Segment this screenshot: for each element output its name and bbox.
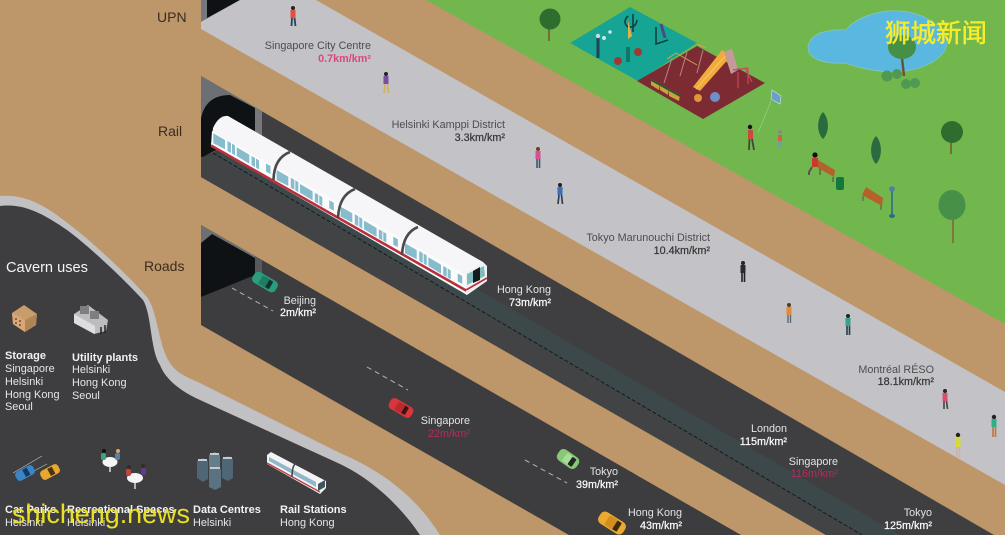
tree and bushes at pond: [882, 35, 920, 89]
walkway density labels: [265, 40, 934, 388]
lamp post: [889, 186, 895, 218]
road density labels: 22m/km²: [428, 428, 470, 440]
cavern bottom text labels: Helsinki: [67, 517, 105, 529]
train front: [466, 263, 487, 295]
car: Hong Kong yellow: [596, 510, 628, 535]
cavern bottom text labels: [5, 504, 347, 529]
train windows: [213, 133, 462, 284]
train: [211, 116, 487, 295]
road density labels: 39m/km²: [576, 479, 618, 491]
kite and flyers: [748, 90, 782, 150]
icon: storage box: [12, 305, 37, 332]
car: Beijing teal: [250, 270, 280, 294]
road tunnel level: [201, 225, 741, 535]
fitness area: [570, 7, 697, 81]
tier labels: UPN: [157, 9, 187, 25]
road density labels: Tokyo: [590, 466, 618, 478]
walkway density labels: Montréal RÉSO: [858, 363, 934, 376]
rail density labels: 115m/km²: [740, 436, 787, 448]
tier labels: [144, 9, 187, 274]
rail density labels: Singapore: [789, 456, 838, 468]
pedestrians: [290, 6, 996, 458]
cavern bottom text labels: Rail Stations: [280, 504, 347, 516]
storage text: Singapore: [5, 363, 55, 375]
bench with seated person: [809, 152, 835, 182]
bench: [862, 187, 883, 210]
rail density labels: London: [751, 423, 787, 435]
storage text: Seoul: [5, 401, 33, 413]
cavern bottom text labels: Data Centres: [193, 504, 261, 516]
UPN walkway level: [201, 0, 1005, 485]
walkway density labels: 18.1km/km²: [878, 376, 934, 388]
walkway density labels: Tokyo Marunouchi District: [586, 232, 710, 244]
cavern area with grey lining: [0, 196, 440, 535]
rail tunnel level: [201, 76, 994, 535]
litter bin: [836, 177, 844, 190]
playground area: [637, 44, 765, 119]
surface park lawn: [426, 0, 1005, 324]
cypress trees: [818, 112, 881, 164]
tree near playground: [540, 8, 560, 41]
icon: data centres: [197, 452, 233, 490]
cavern uses heading: Cavern uses: [6, 260, 88, 276]
icon: car parks: [13, 456, 61, 482]
rail density labels: Hong Kong: [497, 284, 551, 296]
storage text: Storage: [5, 350, 46, 362]
road density labels: Beijing: [284, 295, 316, 307]
icon: rail station train: [267, 452, 326, 494]
cavern bottom text labels: Car Parks: [5, 504, 56, 516]
car: Tokyo light green: [555, 447, 581, 471]
rail density labels: [497, 284, 932, 532]
road density labels: [280, 295, 682, 532]
tree right: [941, 121, 963, 154]
icon: utility plant: [74, 305, 108, 334]
storage text: Hong Kong: [5, 389, 60, 401]
icon: recreational tables: [101, 449, 146, 489]
road density labels: 43m/km²: [640, 520, 682, 532]
utility plants text: [72, 352, 138, 402]
rail density labels: 116m/km²: [791, 468, 838, 480]
road density labels: Hong Kong: [628, 507, 682, 519]
walkway density labels: Helsinki Kamppi District: [392, 119, 505, 131]
watermark: Chinese site name: 狮城新闻: [885, 13, 987, 50]
cavern bottom text labels: Helsinki: [193, 517, 231, 529]
road density labels: 2m/km²: [280, 307, 316, 319]
rail density labels: Tokyo: [904, 507, 932, 519]
walkway density labels: 3.3km/km²: [455, 132, 505, 144]
tree lower right: [938, 190, 966, 243]
walkway density labels: 0.7km/km²: [318, 53, 371, 65]
walkway density labels: Singapore City Centre: [265, 40, 371, 52]
cavern bottom text labels: Recreational Spaces: [67, 504, 175, 516]
tier labels: Rail: [158, 123, 182, 139]
train red stripe: [211, 146, 467, 291]
pond: [808, 11, 947, 72]
utility plants text: Hong Kong: [72, 377, 126, 389]
road lane markings: [232, 288, 567, 483]
storage text: [5, 350, 60, 413]
cavern bottom text labels: Hong Kong: [280, 517, 334, 529]
utility plants text: Utility plants: [72, 352, 138, 364]
storage text: Helsinki: [5, 376, 43, 388]
tier labels: Roads: [144, 258, 184, 274]
road density labels: Singapore: [421, 415, 470, 427]
car: Singapore red: [387, 396, 415, 420]
train car connectors: [274, 152, 418, 255]
utility plants text: Helsinki: [72, 364, 110, 376]
watermark: site url: shicheng.news: [12, 499, 190, 529]
walkway density labels: 10.4km/km²: [654, 245, 710, 257]
utility plants text: Seoul: [72, 390, 100, 402]
rail density labels: 125m/km²: [884, 520, 932, 532]
cavern bottom text labels: Helsinki: [5, 517, 43, 529]
rail density labels: 73m/km²: [509, 297, 551, 309]
